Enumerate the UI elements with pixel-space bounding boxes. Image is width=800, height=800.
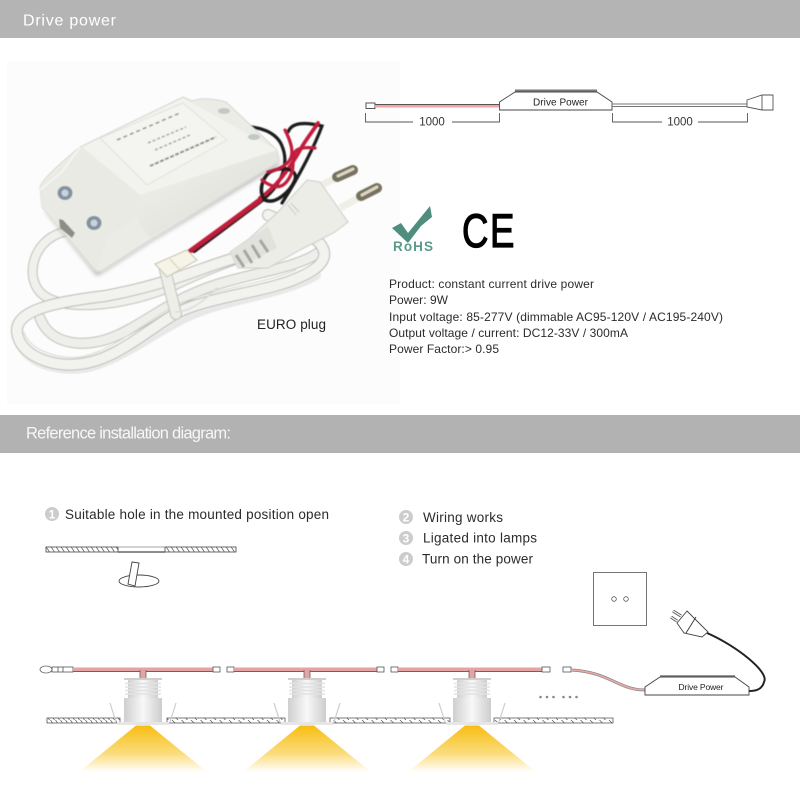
header bar: Drive power: Drive power: [23, 12, 117, 30]
product specifications: Product: constant current drive power: [389, 277, 594, 291]
ceiling panels: [47, 718, 613, 723]
lamp 3: [408, 668, 536, 772]
input wire with plug: [612, 95, 773, 110]
wiring run: [40, 666, 645, 690]
small drive power box: [645, 676, 749, 695]
steps 2 to 4: 3: [403, 532, 410, 546]
icon: CE mark: CE: [462, 205, 516, 257]
dimension left: [366, 113, 500, 128]
header bar: Reference installation diagram: Reference installation diagram:: [26, 424, 231, 442]
photo: driver box: [40, 97, 279, 276]
header bar: Drive power: [0, 0, 800, 38]
steps 2 to 4: Wiring works: [423, 510, 503, 525]
product specifications: Input voltage: 85-277V (dimmable AC95-120V / AC195-240V): [389, 310, 723, 324]
small drive power box: Drive Power: [678, 682, 724, 692]
lamp 1: [79, 668, 207, 772]
product specifications: [389, 277, 723, 356]
photo: white wire connector: [155, 250, 197, 277]
euro plug label: EURO plug: [257, 317, 326, 332]
steps 2 to 4: Turn on the power: [422, 552, 534, 566]
panel: product photo: [7, 62, 400, 404]
product specifications: Power Factor:> 0.95: [389, 342, 499, 356]
steps 2 to 4: 4: [403, 552, 410, 566]
steps 2 to 4: Ligated into lamps: [423, 530, 537, 546]
dimension right: 1000: [667, 116, 693, 128]
icon: RoHS mark: [392, 206, 433, 254]
icon: RoHS mark: RoHS: [393, 239, 433, 254]
photo: euro plug: [230, 169, 377, 268]
step 1: Suitable hole in the mounted position open: [65, 507, 329, 522]
drive power box: [500, 90, 612, 110]
step 1 illustration: ceiling with hole: [46, 547, 236, 587]
steps 2 to 4: [399, 510, 537, 566]
photo: power cable coils: [17, 215, 324, 369]
plug and power cord: [671, 611, 765, 691]
wall socket: [594, 572, 646, 626]
lamp 2: [243, 668, 371, 772]
photo: red and black wires: [190, 123, 322, 251]
dimension left: 1000: [419, 116, 445, 128]
dimension right: [612, 113, 748, 128]
steps 2 to 4: 2: [403, 510, 410, 524]
continuation dots: [539, 696, 578, 698]
product specifications: Power: 9W: [389, 293, 449, 307]
header bar: Reference installation diagram: [0, 415, 800, 453]
step 1: 1: [49, 508, 56, 522]
product specifications: Output voltage / current: DC12-33V / 300mA: [389, 326, 628, 340]
drive power box: Drive Power: [533, 98, 589, 108]
output wire with connector: [366, 103, 499, 108]
wiring dimension diagram: [366, 90, 773, 128]
